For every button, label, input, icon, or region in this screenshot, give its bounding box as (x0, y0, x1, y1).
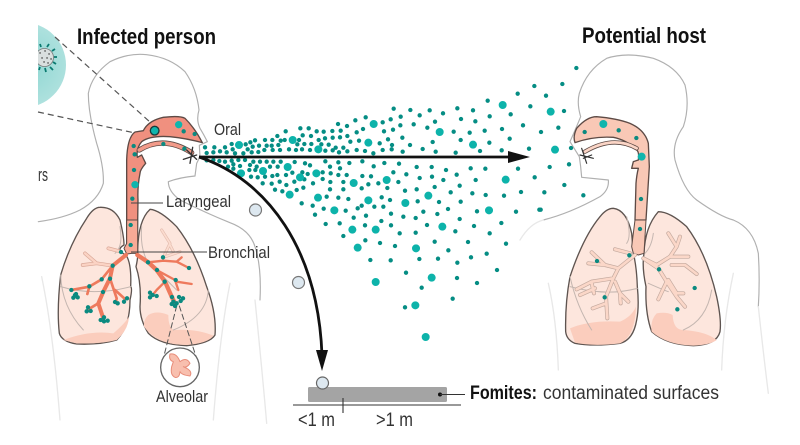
droplet cloud (205, 68, 583, 337)
host lung shading (570, 217, 717, 346)
host mouth band (580, 142, 637, 163)
large droplets (239, 105, 555, 337)
label: bronchial (131, 243, 270, 262)
arrow: droplet fall (199, 157, 328, 371)
arrow: airborne spread (199, 151, 530, 163)
label: more than 1 m: >1 m (376, 410, 413, 431)
droplet on surface (316, 377, 328, 389)
host airway droplets (585, 130, 695, 309)
host left lung (566, 208, 638, 345)
falling droplet 2 (292, 276, 304, 288)
small droplets (205, 68, 583, 307)
right figure: potential host (520, 55, 768, 393)
label: oral: Oral (214, 120, 241, 139)
trachea (124, 220, 138, 254)
host bronchi (577, 233, 697, 318)
falling droplet 1 (250, 204, 262, 216)
host large droplets (599, 120, 646, 161)
airway (127, 117, 202, 245)
host right lung (643, 212, 720, 346)
dashed zoom lines (38, 37, 150, 133)
clipped label: rs (38, 165, 48, 185)
right bronchi (137, 230, 192, 303)
label: contaminated surfaces: contaminated surfaces (543, 383, 719, 404)
title: infected person: Infected person (77, 24, 216, 49)
left figure: infected person (38, 54, 267, 423)
airway and lung teal droplets (71, 131, 195, 321)
label: less than 1 m: <1 m (298, 410, 335, 431)
host body outline (520, 55, 768, 393)
left bronchi (72, 248, 126, 318)
large droplets in airway (131, 121, 182, 188)
host airway (574, 117, 649, 220)
left lung (58, 207, 132, 344)
magnified lens with virus (38, 25, 66, 181)
label: laryngeal (131, 192, 231, 211)
alveolar callout (161, 306, 199, 387)
host trachea (632, 220, 646, 255)
virus icon (36, 44, 57, 72)
label: laryngeal: Laryngeal (166, 192, 231, 211)
label: alveolar: Alveolar (156, 387, 208, 406)
label: bronchial: Bronchial (208, 243, 270, 262)
right lung (136, 209, 215, 346)
title: potential host: Potential host (582, 23, 707, 48)
mouth band (139, 143, 197, 163)
surface (293, 387, 465, 413)
label: fomites: Fomites: (470, 383, 537, 404)
body outline (38, 54, 267, 423)
lung shading (61, 227, 213, 345)
